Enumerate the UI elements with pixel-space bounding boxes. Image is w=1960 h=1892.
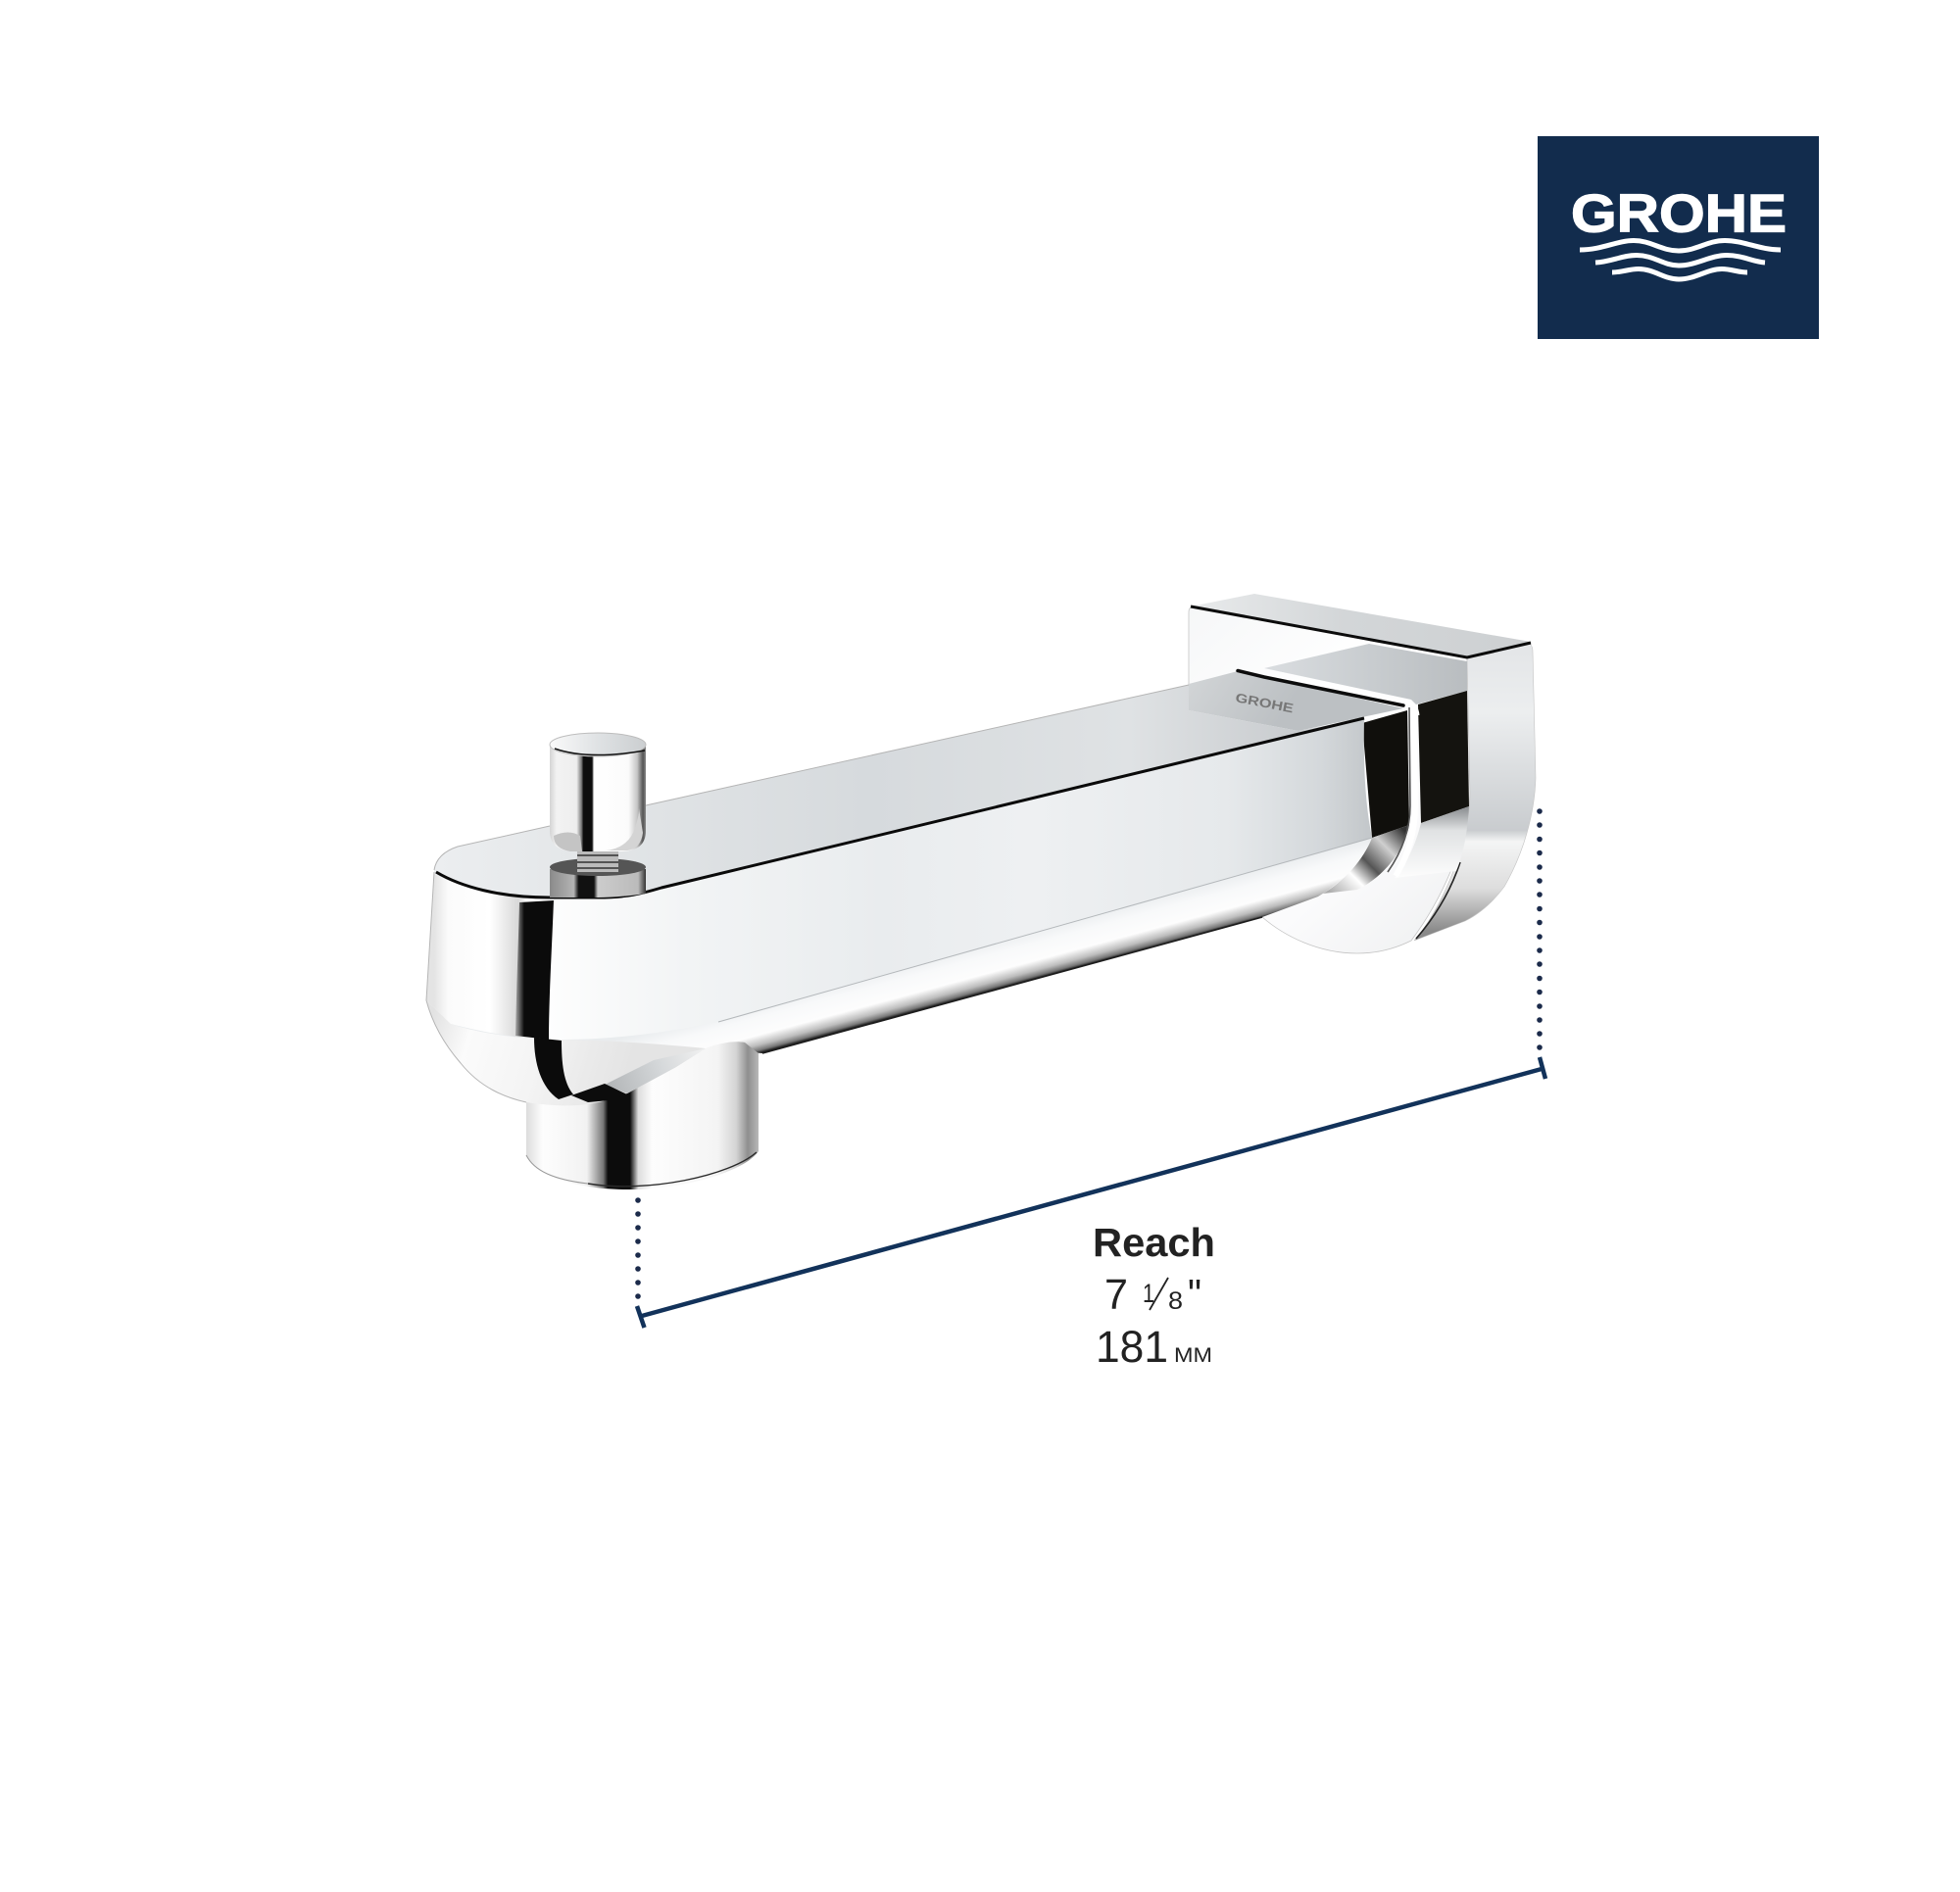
reach measurement label: 8 — [1168, 1287, 1183, 1315]
reach measurement label: MM — [1174, 1344, 1212, 1367]
spout lower edge — [762, 917, 1262, 1053]
tip dark wedge — [571, 1084, 627, 1102]
GROHE logo — [1538, 136, 1819, 339]
right dotted guide — [1537, 808, 1543, 1050]
spout top face — [434, 685, 1364, 897]
outlet cylinder — [526, 1042, 759, 1189]
wall plate — [1189, 594, 1536, 953]
small engraved logo: GROHE — [1234, 690, 1296, 715]
GROHE logo: GROHE — [1571, 182, 1787, 243]
dimension line — [637, 1057, 1545, 1328]
reach measurement label: 1 — [1143, 1279, 1154, 1308]
front top dark edge — [436, 718, 1364, 897]
diverter knob — [550, 733, 646, 897]
spout underside — [451, 838, 1372, 1102]
left dotted guide — [635, 1197, 641, 1299]
faucet tub spout — [426, 594, 1536, 1189]
reach measurement label: 7 — [1104, 1271, 1128, 1319]
front dark reflection — [515, 900, 554, 1040]
spout tip lower bevel — [426, 1000, 706, 1105]
tip chamfer wedge — [605, 1048, 706, 1093]
neck block — [1189, 644, 1469, 894]
spout front face — [426, 718, 1372, 1040]
reach measurement label — [1093, 1220, 1215, 1372]
reach measurement label: Reach — [1093, 1220, 1215, 1265]
spout crease — [718, 838, 1372, 1022]
reach measurement label: " — [1188, 1271, 1201, 1319]
tip curved reflection — [534, 1038, 573, 1099]
spout outline — [426, 685, 1189, 1102]
reach measurement label: 181 — [1096, 1322, 1168, 1372]
